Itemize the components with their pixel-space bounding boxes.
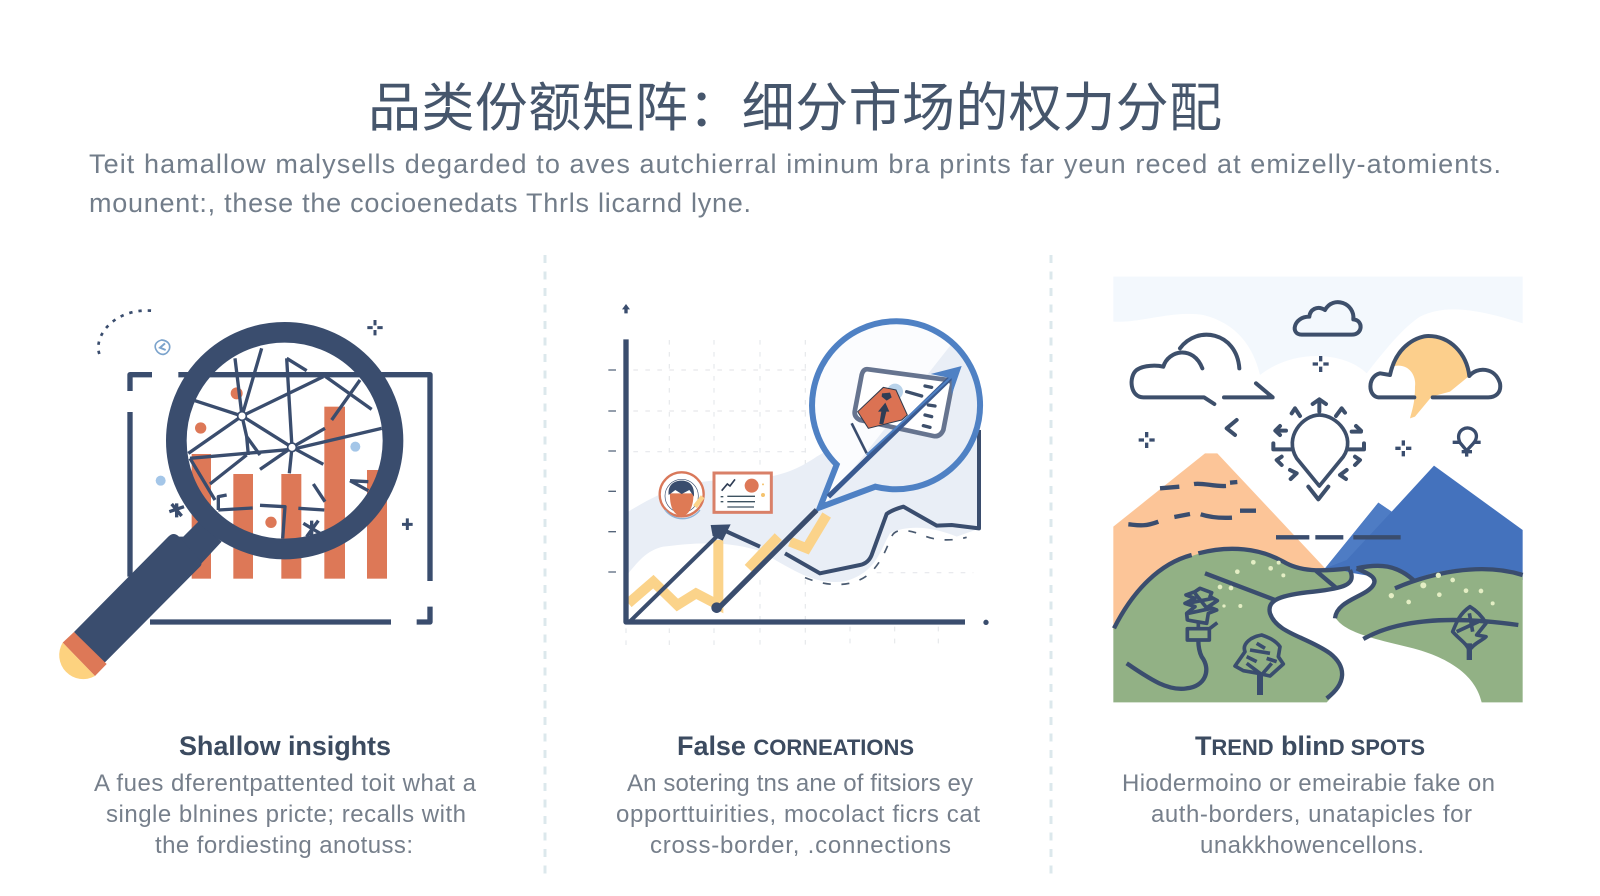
area band [628,350,980,582]
blue mountains [1325,466,1523,583]
heading: TREND blinD SPOTS [1195,731,1425,761]
meadow dots [1218,560,1495,608]
top cloud [1295,302,1361,335]
subtitle text block [89,149,1501,218]
panel: shallow insights illustration [59,311,430,679]
magnifier handle [59,522,222,679]
body text: auth-borders, unatapicles for [1151,801,1472,828]
hill contour lines [1114,549,1523,698]
venus symbol [1453,428,1481,457]
body text: unakkhowencellons. [1200,832,1424,859]
dark trend line [723,430,979,573]
bar chart [192,407,387,579]
body text: A fues dferentpattented toit what a [94,770,477,797]
subtitle text block: Teit hamallow malysells degarded to aves autchierral iminum bra prints far yeun reced at emizelly-atomients. [89,149,1501,179]
axis ticks [608,370,616,572]
card in bubble [852,369,952,453]
dashed forecast [805,530,967,584]
tree right [1453,607,1486,660]
green hills [1113,549,1523,702]
icon: small badge [155,340,170,354]
orange mountain [1113,453,1327,630]
panel: false correlations illustration [608,304,989,650]
axes [626,339,965,622]
body text: cross-border, .connections [650,832,951,859]
heading: False CORNEATIONS [677,731,914,761]
network lines in lens [169,348,382,538]
body text: opporttuirities, mocolact ficrs cat [616,801,980,828]
mini report card [714,473,771,512]
chart frame [130,375,430,622]
dotted arc [98,311,152,354]
body text: An sotering tns ane of fitsiors ey [627,770,973,797]
body text [94,770,477,859]
sun behind cloud [1370,336,1500,418]
sparkles [367,320,413,530]
title: 品类份额矩阵：细分市场的权力分配 [368,79,1222,138]
body text [616,770,980,859]
body text: single blnines pricte; recalls with [106,801,466,828]
body text: Hiodermoino or emeirabie fake on [1122,770,1495,797]
grid [626,340,973,650]
main arrow [718,366,962,608]
yellow trend line [628,515,827,605]
axis arrow and dot [622,304,630,313]
left clouds [1132,335,1273,435]
location pin with arrows [1273,399,1364,499]
mountain dashes [1128,482,1401,537]
panel text: shallow insights [94,731,477,859]
tree centre [1235,635,1283,695]
panel text: trend blind spots [1122,731,1495,859]
magnifier ring [176,332,393,549]
panel text: false correlations [616,731,980,859]
subtitle text block: mounent:, these the cocioenedats Thrls licarnd lyne. [89,188,751,218]
scatter dots [156,387,360,528]
body text: the fordiesting anotuss: [155,832,413,859]
panel: trend blind spots landscape [1113,277,1523,702]
callout bubble [812,321,980,507]
sky [1113,277,1523,375]
avatar [660,472,704,519]
sparkles [1139,356,1411,456]
tree left [1185,588,1217,640]
rising arrows [629,524,731,622]
body text [1122,770,1495,859]
heading: Shallow insights [179,731,391,761]
